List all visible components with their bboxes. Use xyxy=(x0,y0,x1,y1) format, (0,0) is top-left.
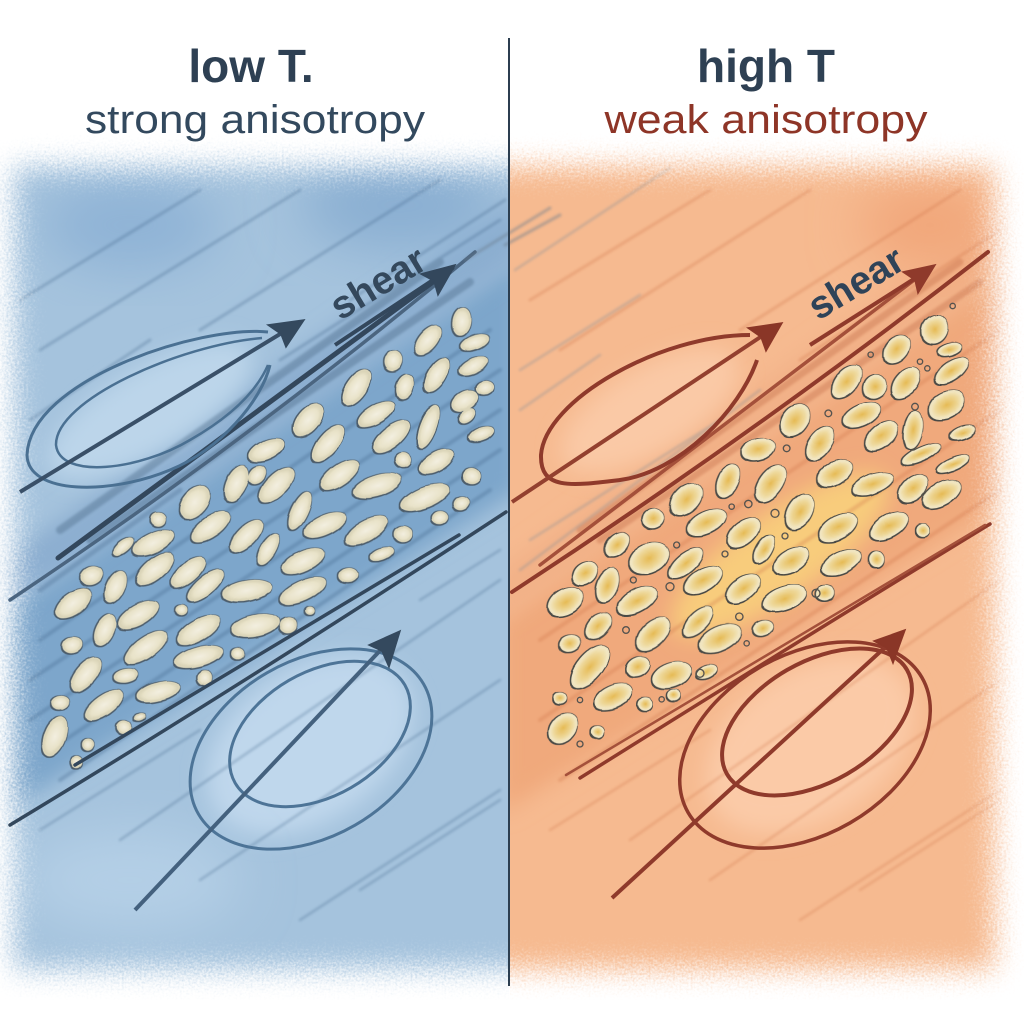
upper ellipse and arrow xyxy=(512,323,782,502)
shear arrow xyxy=(335,265,455,345)
grey streaks upper left xyxy=(515,168,760,570)
grains: rounder less aligned xyxy=(544,311,976,748)
heading: low T: low T. xyxy=(188,40,314,92)
subheading: weak anisotropy: weak anisotropy xyxy=(603,98,928,142)
shear band lines xyxy=(512,252,990,778)
heading: high T: high T xyxy=(697,40,835,92)
shear arrow xyxy=(810,265,935,345)
panel: low T xyxy=(0,130,520,1000)
small dark specks between grains xyxy=(577,303,955,747)
background wash: orange xyxy=(500,130,1024,1000)
label: shear: shear xyxy=(323,238,434,329)
streaks: shear texture xyxy=(530,190,1000,920)
background wash: blue xyxy=(0,130,520,1000)
upper ellipses and arrow xyxy=(20,320,304,492)
lower ellipses and arrow xyxy=(610,628,932,900)
grey streaks crossing the divider xyxy=(465,208,560,260)
label: shear: shear xyxy=(801,238,912,329)
panel: high T xyxy=(500,130,1024,1000)
subheading: strong anisotropy: strong anisotropy xyxy=(85,98,425,142)
grains: elongated aligned xyxy=(39,307,496,767)
shear band lines xyxy=(10,252,506,825)
streaks: shear texture xyxy=(20,180,505,920)
divider xyxy=(508,38,510,986)
lower ellipses and arrow xyxy=(134,630,434,912)
